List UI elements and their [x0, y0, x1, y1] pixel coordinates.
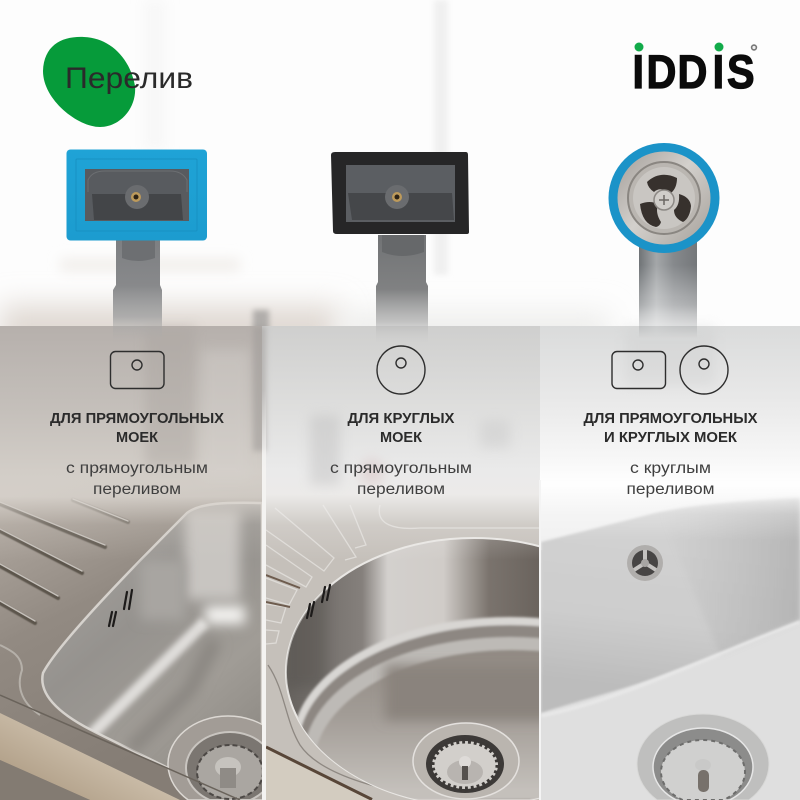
column 3: text: с круглым: [630, 460, 711, 477]
column 1: text: [50, 411, 224, 498]
column 1: text: ДЛЯ ПРЯМОУГОЛЬНЫХ: [50, 411, 224, 427]
product: rectangular black overflow: [331, 152, 469, 343]
band: right: [540, 326, 800, 540]
deck ridges: [0, 499, 128, 623]
bowl wall: [541, 498, 800, 713]
column 3: text: переливом: [626, 481, 714, 498]
decoration: green blob: [43, 37, 135, 127]
column 3: text: И КРУГЛЫХ МОЕК: [604, 430, 737, 446]
panel: rectangular stainless sink photo: [0, 480, 262, 800]
overflow fitting: [627, 545, 663, 581]
column 3: icons rectangular and round sink: [612, 346, 728, 394]
drain strainer: [167, 715, 262, 800]
panel bands with fade: [0, 326, 800, 800]
inner housing: [85, 169, 189, 221]
title: Перелив: [65, 62, 193, 95]
round bowl: [285, 537, 539, 800]
deck ridges: [266, 505, 539, 800]
column 2: icon round sink: [377, 346, 425, 394]
vents: [647, 175, 677, 193]
logo dots: [634, 42, 724, 52]
column 2: text: переливом: [357, 481, 445, 498]
column 1: text: переливом: [93, 481, 181, 498]
blue gasket: [608, 143, 720, 253]
logo: IDDIS: IDDIS: [632, 47, 755, 99]
column 3: text: ДЛЯ ПРЯМОУГОЛЬНЫХ: [584, 411, 758, 427]
column 2: text: с прямоугольным: [330, 460, 472, 477]
speckled countertop: [266, 748, 372, 800]
column 1: icon rectangular sink: [110, 352, 164, 388]
drain strainer: [637, 714, 769, 800]
band: left: [0, 326, 262, 560]
pipe: [639, 240, 697, 338]
panel: round stainless sink photo: [266, 496, 539, 800]
blue gasket: [66, 150, 207, 240]
steel flange: [618, 152, 710, 244]
band: middle: [262, 326, 540, 560]
black gasket: [331, 152, 469, 234]
overflow slots: [109, 590, 132, 626]
registered mark: [751, 44, 757, 51]
column 1: text: с прямоугольным: [66, 460, 208, 477]
product: rectangular blue overflow: [66, 150, 207, 342]
column 3: text: [584, 411, 758, 498]
column 2: text: ДЛЯ КРУГЛЫХ: [348, 411, 455, 427]
inner housing: [346, 165, 455, 222]
pipe: [113, 240, 162, 342]
pipe: [376, 235, 428, 343]
drain strainer: [413, 723, 519, 799]
sink bowl: [42, 503, 262, 800]
wood countertop: [0, 713, 180, 800]
column 2: text: МОЕК: [380, 430, 422, 446]
overflow slots: [307, 585, 330, 618]
column 2: text: [330, 411, 472, 498]
threaded nut: [125, 185, 149, 209]
threaded nut: [385, 185, 409, 209]
screw: [654, 190, 674, 210]
product: round overflow: [608, 143, 720, 338]
panel: granite sink photo: [541, 470, 800, 800]
column 1: text: МОЕК: [116, 430, 158, 446]
